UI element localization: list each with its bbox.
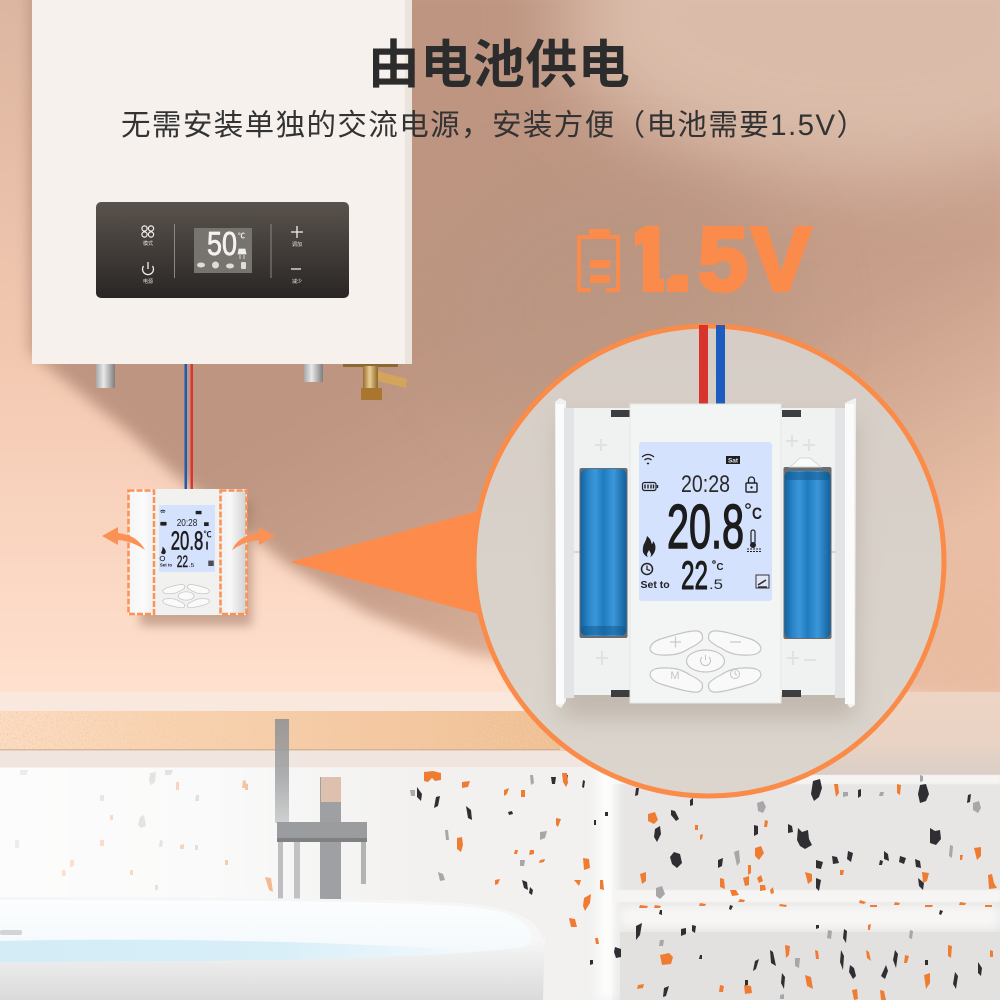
water heater body [32, 0, 412, 364]
small lcd: Set to [160, 562, 172, 567]
terrazzo grey chips [15, 770, 981, 999]
icon: battery level [642, 482, 658, 490]
terrazzo wall [0, 767, 1000, 1000]
button power [686, 650, 724, 672]
button minus [708, 631, 761, 655]
set temperature: 22 [681, 554, 708, 598]
clock reading: 20:28 [681, 471, 730, 498]
terrazzo orange chips [62, 771, 997, 1000]
water pipe fittings [96, 364, 407, 400]
set temperature decimal: .5 [709, 576, 723, 592]
voltage label: 1.5V [624, 210, 811, 310]
degree unit [746, 504, 762, 523]
small lcd [159, 505, 215, 572]
faucet [275, 719, 367, 901]
water heater control panel [96, 202, 349, 298]
current temperature: 20.8 [667, 493, 744, 562]
panel display: ℃ [238, 232, 245, 240]
small lcd: 20:28 [177, 518, 198, 529]
clips [611, 410, 801, 697]
countertop ledge [0, 692, 1000, 776]
keypad [650, 631, 761, 692]
small lcd: .5 [188, 563, 194, 569]
clock glyph [730, 670, 740, 678]
magnified circle callout [474, 325, 944, 796]
power icon [142, 262, 154, 275]
icon: floor thermometer [747, 530, 761, 552]
set temperature unit [713, 561, 724, 573]
icon: clock [642, 564, 652, 574]
icon: bed mode [756, 575, 769, 588]
panel display: 50 [207, 225, 237, 262]
small thermostat [128, 489, 252, 626]
small dashed battery door left [128, 490, 154, 614]
day badge [726, 456, 740, 464]
terrazzo dark chips [417, 775, 982, 997]
title: 由电池供电 [368, 37, 630, 95]
wires [699, 325, 725, 405]
small lcd: 22 [177, 552, 188, 571]
button mode [650, 668, 702, 692]
small lcd: 20.8 [171, 526, 203, 556]
water heater control panel: 调加 [292, 241, 302, 248]
bathtub [0, 897, 545, 1000]
day badge: Sat [728, 458, 739, 464]
lcd screen [639, 442, 772, 601]
subtitle: 无需安装单独的交流电源，安装方便（电池需要1.5V） [121, 109, 866, 142]
set temperature unit: C [716, 562, 724, 573]
left battery [580, 468, 628, 638]
wall background [0, 0, 1000, 710]
small lcd: ℃ [204, 530, 212, 539]
arrow: right door opens [232, 527, 275, 550]
icon: wifi [642, 454, 654, 464]
steam fog over wall [0, 768, 420, 1000]
panel display [194, 225, 252, 273]
water heater control panel: 电源 [143, 278, 153, 285]
button clock [708, 668, 761, 692]
small keypad [163, 585, 209, 608]
plus minus controls [291, 226, 303, 269]
center faceplate [630, 404, 781, 703]
degree unit: C [752, 504, 762, 523]
icon: flame [643, 536, 655, 557]
power glyph [701, 655, 710, 666]
small thermostat wires [184, 364, 193, 490]
device shadow [560, 420, 856, 718]
battery icon [577, 229, 620, 292]
button plus [650, 631, 702, 655]
callout pointer cone [290, 511, 478, 614]
opened thermostat housing [555, 398, 856, 708]
mode icon [142, 226, 154, 237]
arrow: left door opens [102, 527, 145, 550]
icon: lock [746, 477, 757, 492]
water heater control panel: 减少 [292, 278, 302, 285]
small dashed battery door right [220, 490, 246, 614]
right battery [784, 458, 832, 639]
water heater control panel: 模式 [143, 240, 153, 247]
set to label: Set to [640, 579, 670, 591]
mode letter: M [670, 670, 680, 682]
